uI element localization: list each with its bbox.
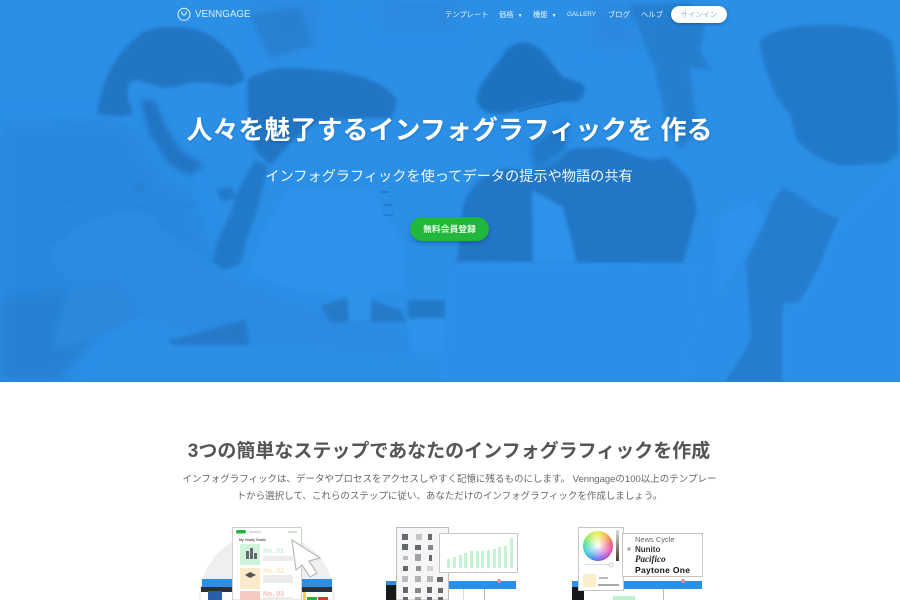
icon panel — [396, 528, 448, 600]
colour wheel — [583, 531, 613, 561]
man arm — [50, 211, 415, 358]
man hair — [97, 27, 245, 116]
laptop — [442, 262, 725, 382]
icon: logo clock — [178, 8, 190, 21]
table papers — [168, 320, 250, 345]
template sheet: My Yearly Goals — [239, 538, 266, 542]
font picker card — [622, 534, 702, 576]
hero bottom edge — [0, 381, 900, 382]
hero subtitle: インフォグラフィックを使ってデータの提示や物語の共有 — [265, 169, 633, 185]
app toolbar — [386, 579, 516, 600]
bar chart card — [440, 534, 518, 572]
hat man shirt — [532, 190, 577, 263]
colour picker card — [578, 528, 624, 590]
soft background tones — [0, 0, 640, 382]
nav item: 機能 ▼ — [533, 10, 557, 19]
logo wordmark: VENNGAGE — [195, 9, 251, 20]
gap under elbow — [717, 202, 763, 287]
step 2 illustration: icons and chart — [386, 527, 518, 600]
right woman sweater — [783, 160, 900, 382]
template sheet: No. 01 — [263, 548, 284, 555]
step 3 illustration: colour and font pickers — [572, 527, 703, 600]
man hand — [54, 280, 140, 350]
hat man glasses — [518, 98, 568, 112]
right woman neck and hair — [723, 187, 840, 382]
template sheet: No. 03 — [263, 591, 284, 598]
font name: News Cycle — [635, 535, 675, 544]
section description: インフォグラフィックは、データやプロセスをアクセスしやすく記憶に残るものにします。 Venngageの100以上のテンプレー — [182, 474, 716, 485]
template sheet: No. 02 — [263, 568, 284, 575]
call to action button — [410, 217, 489, 241]
nav item: 価格 ▼ — [499, 10, 523, 19]
table cups — [320, 298, 408, 322]
template sheet — [232, 528, 302, 600]
sign in button — [671, 6, 727, 23]
section description: トから選択して、これらのステップに従い、あなただけのインフォグラフィックを作成しましょう。 — [237, 491, 662, 502]
font name: Pacifico — [635, 554, 666, 564]
section heading: 3つの簡単なステップであなたのインフォグラフィックを作成 — [188, 441, 710, 462]
font name: Paytone One — [635, 565, 690, 575]
nav item: ヘルプ — [641, 10, 663, 19]
middle woman hair — [247, 68, 397, 165]
navigation — [445, 5, 728, 26]
app toolbar — [572, 579, 702, 600]
hat man face — [505, 97, 573, 172]
font name: Nunito — [635, 545, 660, 554]
man collar and arm lines — [50, 202, 200, 245]
hero panel — [0, 0, 900, 382]
middle woman shirt — [250, 190, 405, 295]
grey circle backdrop — [199, 532, 335, 600]
hero title: 人々を魅了するインフォグラフィックを 作る — [187, 115, 712, 145]
man beard — [140, 100, 205, 175]
plant left — [212, 8, 312, 272]
plant right — [630, 2, 712, 150]
hero photo: people at a table, blue duotone — [0, 2, 900, 382]
hat — [477, 43, 585, 114]
logo — [178, 8, 251, 21]
app toolbar — [201, 579, 332, 600]
sign in button: サインイン — [681, 10, 717, 19]
right woman hand — [685, 187, 783, 382]
nav item: テンプレート — [445, 10, 489, 19]
step 1 illustration: template picker — [199, 527, 335, 600]
nav item: GALLERY — [567, 11, 596, 18]
call to action button: 無料会員登録 — [423, 224, 476, 234]
section description — [182, 474, 716, 502]
nav item: ブログ — [608, 10, 630, 19]
hat man jacket — [457, 147, 697, 263]
icon: mouse cursor — [292, 540, 320, 577]
right woman hair — [760, 25, 898, 166]
